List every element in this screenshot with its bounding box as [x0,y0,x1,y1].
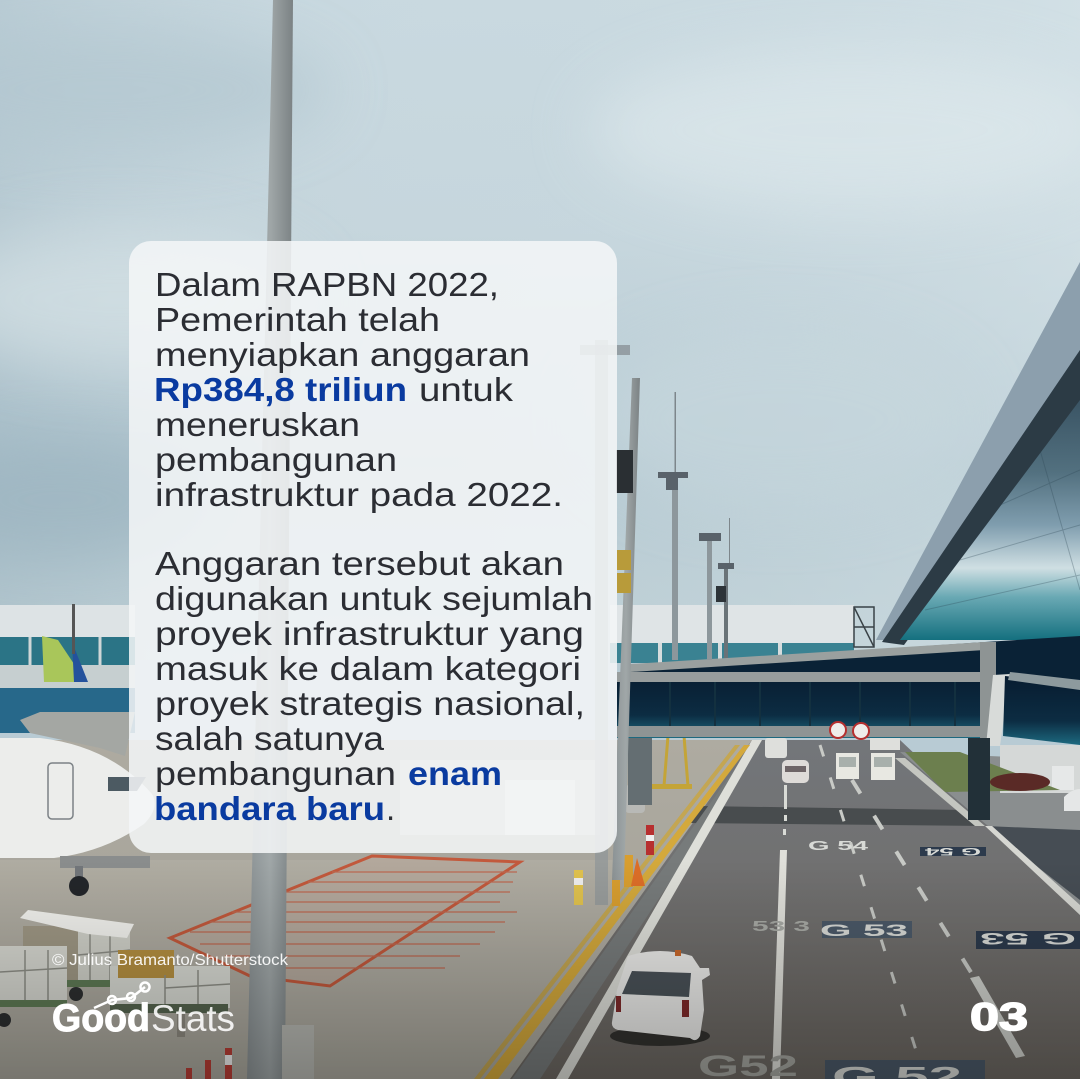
page number: 03 [970,996,1028,1039]
GoodStats logo: Good [52,997,150,1040]
road surface [510,740,1080,1079]
ground: apron [0,740,760,1079]
GoodStats logo: Stats [151,998,235,1039]
road markings: G 54 [808,838,870,853]
paragraph two: . [386,790,395,827]
airport ground equipment [400,735,692,835]
cart right [110,950,230,1037]
paragraph one: menyiapkan anggaran [155,336,530,373]
translucent text panel [129,241,617,853]
paragraph one: untuk [419,371,514,408]
cart rear [20,910,134,1001]
parked aircraft [0,712,155,896]
distant terminal right [610,605,874,663]
paragraph two: digunakan untuk sejumlah [155,580,593,617]
paragraph two: salah satunya [155,720,385,757]
paragraph two: enam [408,755,502,792]
white car in foreground [610,950,710,1046]
terminal building with glass facade [876,262,1080,645]
paragraph two: proyek strategis nasional, [155,685,585,722]
icon: trend line [94,982,150,1008]
paragraph one: infrastruktur pada 2022. [155,476,563,513]
road markings: G 53 [980,929,1076,948]
sky with clouds [0,0,1080,660]
paragraph one: Rp384,8 triliun [154,371,407,408]
paragraph two: masuk ke dalam kategori [155,650,581,687]
paragraph one: Dalam RAPBN 2022, [155,266,499,303]
paragraph one: meneruskan [155,406,360,443]
road markings [474,740,1080,1079]
paragraph two [154,545,593,827]
baggage carts [0,910,230,1037]
GoodStats logo [52,982,235,1040]
distant terminal left [0,604,135,733]
road markings: G 54 [923,845,981,857]
light poles [658,392,734,660]
vehicles on road [625,738,900,813]
apron hatch zone [170,856,520,986]
paragraph one: pembangunan [155,441,397,478]
paragraph one [154,266,563,513]
roadside planting and buildings [895,745,1080,826]
foreground lamp pole [247,0,293,1079]
tall lamp pole near panel [580,340,640,905]
utility box [282,1025,314,1079]
paragraph two: pembangunan [155,755,396,792]
covered skybridge [617,636,1080,820]
cart left [0,946,67,1027]
photo credit: © Julius Bramanto/Shutterstock [52,952,289,969]
paragraph two: Anggaran tersebut akan [155,545,564,582]
paragraph two: bandara baru [154,790,385,827]
road markings: G 53 [820,921,908,940]
road markings: 53 3 [752,918,810,935]
traffic bollards and cone [186,825,654,1079]
paragraph two: proyek infrastruktur yang [155,615,584,652]
paragraph one: Pemerintah telah [155,301,440,338]
bottom shading [0,860,1080,1079]
